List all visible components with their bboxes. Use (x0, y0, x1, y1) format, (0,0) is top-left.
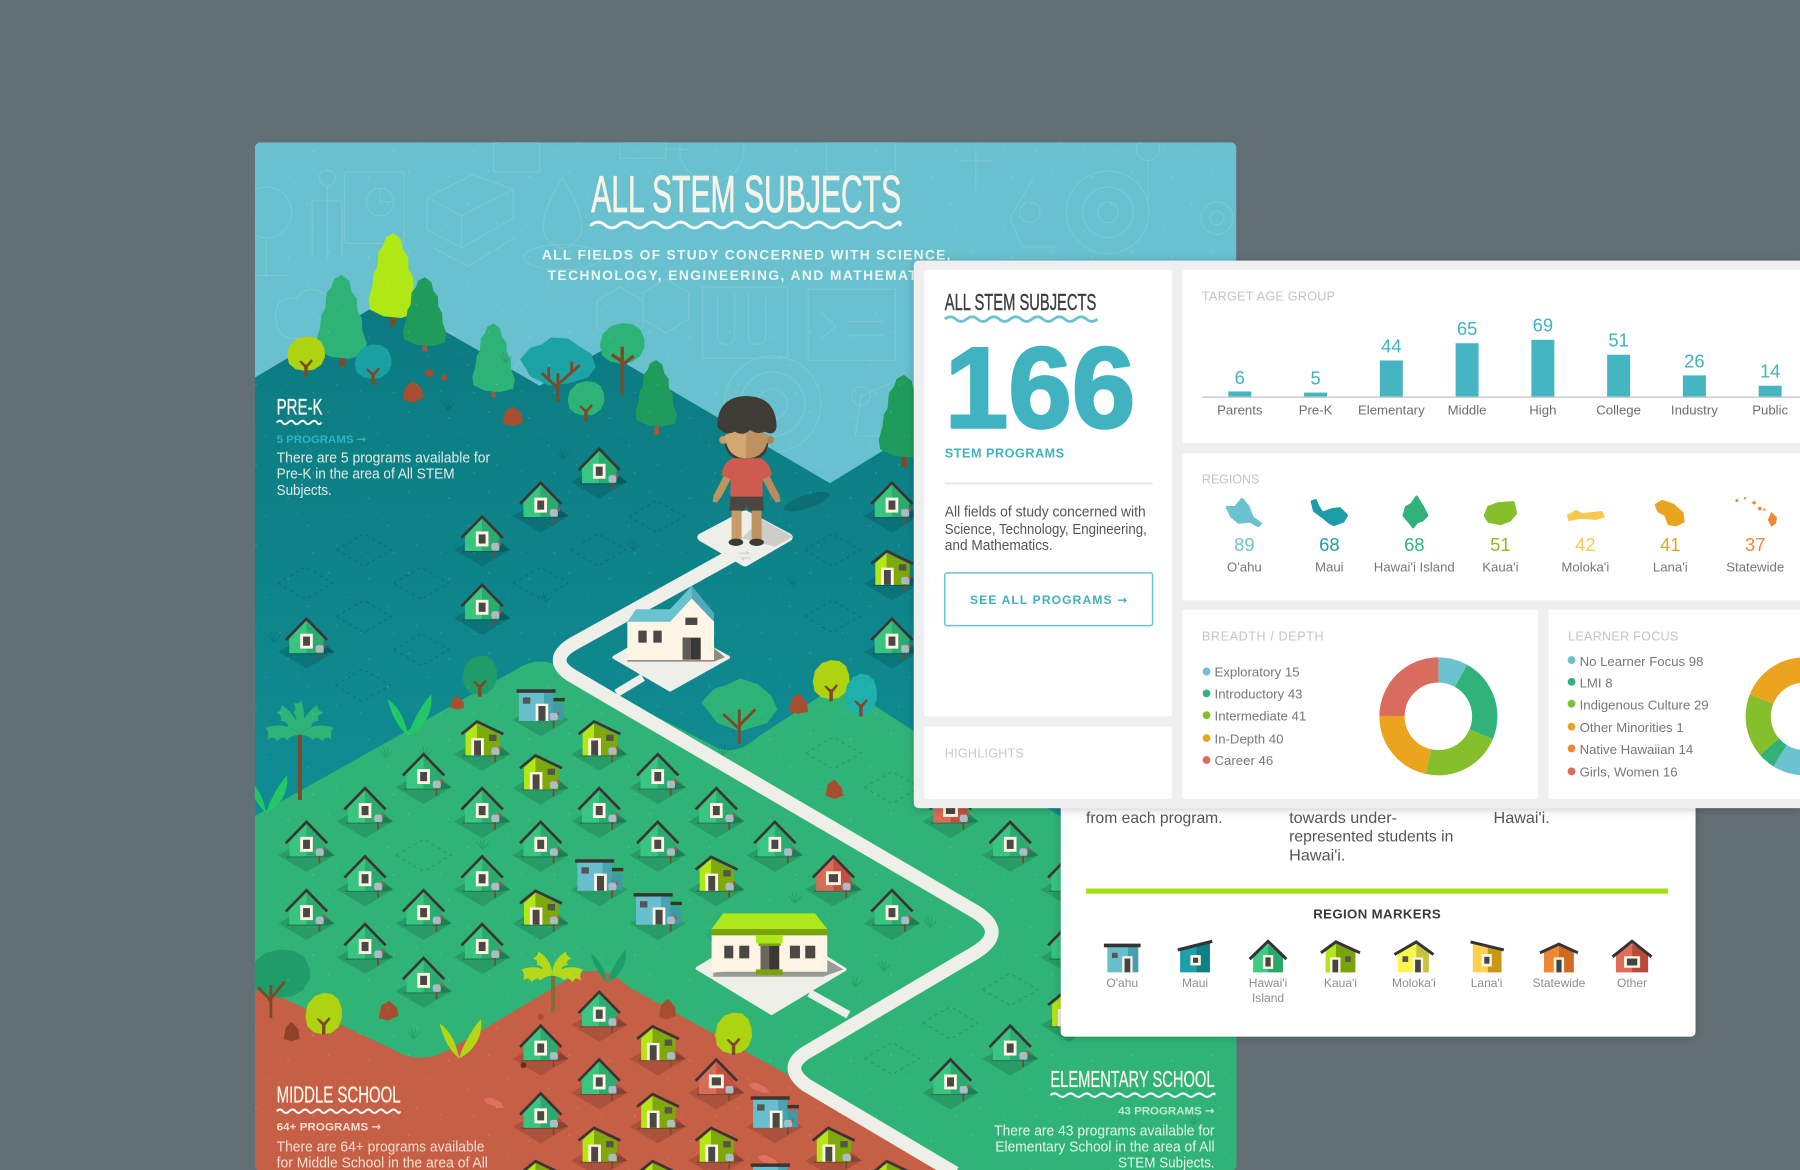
card title: ALL STEM SUBJECTS (945, 289, 1096, 315)
panel: program summary (924, 270, 1172, 716)
panel: breadth / depth (1182, 610, 1538, 799)
legend: In-Depth 40 (1215, 731, 1283, 746)
tree: lime round lower left (305, 993, 342, 1034)
rocks and flowers on the red zone (284, 999, 778, 1165)
poster subtitle: ALL FIELDS OF STUDY CONCERNED WITH SCIENCE, (542, 247, 951, 262)
tree: banana palm (521, 950, 583, 1012)
text block: Middle School (277, 1082, 488, 1170)
marker labels: Kaua'i (1324, 976, 1357, 990)
marker: Maui (1178, 941, 1212, 972)
bar chart: Public (1752, 402, 1789, 417)
button: see all programs (945, 573, 1153, 626)
houses: Elementary zone markers (278, 689, 1097, 1110)
tree: lime conifer (369, 233, 418, 326)
tree: tall round green (600, 323, 645, 395)
region: Statewide: 37 (1745, 534, 1765, 555)
marker: Other (1613, 941, 1652, 972)
region: Hawai'i Island: 68 (1404, 534, 1424, 555)
winding road (560, 551, 992, 1170)
description: All fields of study concerned with (945, 505, 1146, 521)
title wave underline (591, 222, 900, 228)
region: Statewide (1726, 497, 1784, 575)
marker labels (1106, 976, 1647, 1005)
text fragments: programme descriptions: Hawai'i. (1493, 810, 1550, 827)
marker labels: Maui (1182, 976, 1208, 990)
legend: Girls, Women 16 (1580, 765, 1678, 780)
marker labels: Statewide (1532, 976, 1586, 990)
text block: Pre-K: Subjects. (277, 483, 332, 499)
donut chart (1392, 670, 1485, 763)
bar chart: 44 (1381, 335, 1402, 356)
text block: Elementary School: 43 PROGRAMS → (1118, 1104, 1215, 1118)
marker: Hawai'i Island (1250, 941, 1286, 972)
legend: LMI 8 (1580, 676, 1613, 691)
region: Kaua'i: Kaua'i (1482, 560, 1519, 575)
text block: Elementary School: ELEMENTARY SCHOOL (1050, 1066, 1215, 1092)
heading: region markers: REGION MARKERS (1313, 906, 1441, 921)
tree: lime round right (813, 660, 849, 701)
description (945, 505, 1147, 554)
bar chart: College (1596, 402, 1641, 417)
panel: illustrated poster map (241, 117, 1236, 1170)
bar chart: Industry (1671, 402, 1718, 417)
tree: conifer near card (878, 375, 914, 468)
character: student (713, 396, 831, 547)
legend: Other Minorities 1 (1580, 720, 1684, 735)
region: Hawai'i Island: Hawai'i Island (1374, 560, 1455, 575)
text fragments: programme descriptions: Hawai'i. (1289, 847, 1345, 864)
marker: Kaua'i (1321, 942, 1360, 972)
tree: dark bush lower left (250, 949, 310, 1018)
panel: target age group: TARGET AGE GROUP (1202, 290, 1335, 304)
card title wave (945, 317, 1097, 321)
big number: 166 (945, 325, 1135, 453)
ground speckle texture (255, 142, 1236, 1170)
legend: Native Hawaiian 14 (1580, 742, 1693, 757)
faint STEM line icons in the sky (241, 117, 1233, 452)
houses: Middle School zone markers (513, 992, 920, 1170)
rocks on the green hill (379, 693, 844, 1021)
marker: Lana'i (1471, 942, 1504, 972)
plant: bright leaves (248, 695, 431, 813)
bar chart: Elementary (1358, 402, 1425, 417)
marker labels: Hawai'i (1249, 976, 1287, 990)
panel: regions (1182, 453, 1800, 600)
text block: Pre-K (277, 394, 490, 499)
description: Science, Technology, Engineering, (945, 522, 1147, 538)
bar chart: Parents (1217, 402, 1263, 417)
poster subtitle: TECHNOLOGY, ENGINEERING, AND MATHEMATICS. (548, 268, 949, 283)
donut chart (1758, 670, 1800, 763)
region: Maui: Maui (1315, 560, 1344, 575)
marker labels: Lana'i (1471, 976, 1502, 990)
marker labels: Island (1252, 991, 1284, 1005)
marker labels: O'ahu (1106, 976, 1138, 990)
bar chart: 5 (1310, 368, 1321, 389)
marker labels: Other (1617, 976, 1647, 990)
text fragments: programme descriptions (1086, 810, 1550, 864)
rocks on the mountain (403, 369, 523, 426)
tree: dark conifer (403, 277, 447, 351)
hill: green Elementary zone (255, 662, 1236, 1170)
building: Pre-K house (614, 586, 728, 690)
tree: palm left (265, 700, 334, 800)
button: see all programs: SEE ALL PROGRAMS → (970, 593, 1127, 607)
bar chart: 65 (1457, 318, 1477, 339)
panel: highlights: HIGHLIGHTS (945, 747, 1024, 761)
text block: Pre-K: Pre-K in the area of All STEM (277, 466, 455, 482)
tree: lime round (287, 336, 325, 377)
region: Moloka'i: Moloka'i (1561, 560, 1609, 575)
marker: O'ahu (1104, 944, 1141, 972)
lime divider (1086, 889, 1668, 894)
grass tufts (267, 351, 1201, 1165)
panel: target age group (1182, 270, 1800, 443)
bar chart: 69 (1533, 315, 1553, 336)
region: Kaua'i: 51 (1490, 534, 1511, 555)
tree: teal round (355, 344, 391, 385)
panel: dashboard card (914, 261, 1800, 808)
tree: dark round on green hill (463, 655, 497, 697)
panel: highlights (924, 727, 1172, 799)
bar chart: Middle (1448, 402, 1487, 417)
legend: No Learner Focus 98 (1580, 654, 1703, 669)
tree: right dark conifer (636, 360, 677, 435)
tree: green conifer left (316, 275, 367, 366)
houses: Pre-K zone markers (278, 449, 920, 669)
bar chart: Pre-K (1299, 402, 1333, 417)
region: Moloka'i (1561, 511, 1609, 575)
region: O'ahu: O'ahu (1227, 560, 1262, 575)
marker: Moloka'i (1394, 942, 1433, 972)
text block: Elementary School: There are 43 programs available for (994, 1123, 1215, 1139)
region: red Middle School zone (255, 971, 964, 1170)
bar chart: 6 (1235, 367, 1245, 388)
marker: Statewide (1540, 944, 1578, 972)
text block: Middle School: MIDDLE SCHOOL (277, 1082, 401, 1108)
bar chart (1202, 315, 1800, 417)
bar chart: High (1529, 402, 1556, 417)
region: Maui (1312, 501, 1347, 575)
legend: Intermediate 41 (1215, 708, 1306, 723)
text block: Elementary School (994, 1066, 1215, 1170)
tree: wide teal bush with bare trunk (520, 338, 596, 402)
panel: learner focus: LEARNER FOCUS (1568, 630, 1678, 644)
text fragments: programme descriptions: represented students in (1289, 828, 1453, 845)
region: O'ahu: 89 (1234, 534, 1255, 555)
text block: Middle School: 64+ PROGRAMS → (277, 1120, 381, 1134)
poster subtitle (542, 247, 951, 283)
mountains: teal Pre-K zone (255, 298, 1236, 1170)
region: Hawai'i Island (1374, 497, 1455, 575)
text block: Pre-K: There are 5 programs available for (277, 450, 490, 466)
bar chart: 14 (1760, 361, 1780, 382)
plant: dark and lime leaves (440, 950, 626, 1058)
panel: legend sheet with region markers (1061, 746, 1696, 1037)
panel: learner focus (1549, 610, 1800, 799)
legend (1203, 665, 1306, 768)
marker labels: Moloka'i (1392, 976, 1436, 990)
text fragments: programme descriptions: from each program. (1086, 810, 1223, 827)
text block: Middle School: There are 64+ programs available (277, 1139, 484, 1155)
pad: person's starting square (701, 514, 789, 562)
sky background (255, 142, 1236, 1170)
region: Moloka'i: 42 (1575, 534, 1596, 555)
legend: Exploratory 15 (1215, 665, 1300, 680)
region: Lana'i (1653, 502, 1688, 575)
tree: teal round right (845, 674, 877, 716)
region: Statewide: Statewide (1726, 560, 1784, 575)
tree: small round green (568, 381, 604, 421)
panel: regions: REGIONS (1202, 472, 1259, 486)
legend: Indigenous Culture 29 (1580, 697, 1709, 712)
region: Lana'i: Lana'i (1653, 560, 1688, 575)
legend: Career 46 (1215, 753, 1273, 768)
description: and Mathematics. (945, 538, 1053, 554)
bar chart: 51 (1608, 330, 1629, 351)
building: elementary school (697, 913, 845, 1013)
text fragments: programme descriptions: towards under- (1289, 810, 1397, 827)
text block: Pre-K: 5 PROGRAMS → (277, 432, 367, 446)
legend (1568, 654, 1709, 780)
big number caption: STEM PROGRAMS (945, 446, 1064, 460)
panel: breadth / depth: BREADTH / DEPTH (1202, 630, 1324, 644)
region: Kaua'i (1482, 503, 1519, 575)
text block: Elementary School: Elementary School in the area of All (995, 1139, 1215, 1155)
empty lots (dashed diamonds) (278, 501, 1038, 1074)
heading: poster title: ALL STEM SUBJECTS (591, 165, 901, 223)
region: Maui: 68 (1319, 534, 1340, 555)
legend: Introductory 43 (1215, 687, 1303, 702)
region: Lana'i: 41 (1660, 534, 1680, 555)
bar chart: 26 (1684, 350, 1705, 371)
region: O'ahu (1227, 499, 1262, 575)
text block: Pre-K: PRE-K (277, 394, 323, 419)
tree: wide green bush (701, 678, 777, 744)
tree: lime round centre (715, 1012, 752, 1055)
tree: middle conifer (472, 323, 515, 397)
